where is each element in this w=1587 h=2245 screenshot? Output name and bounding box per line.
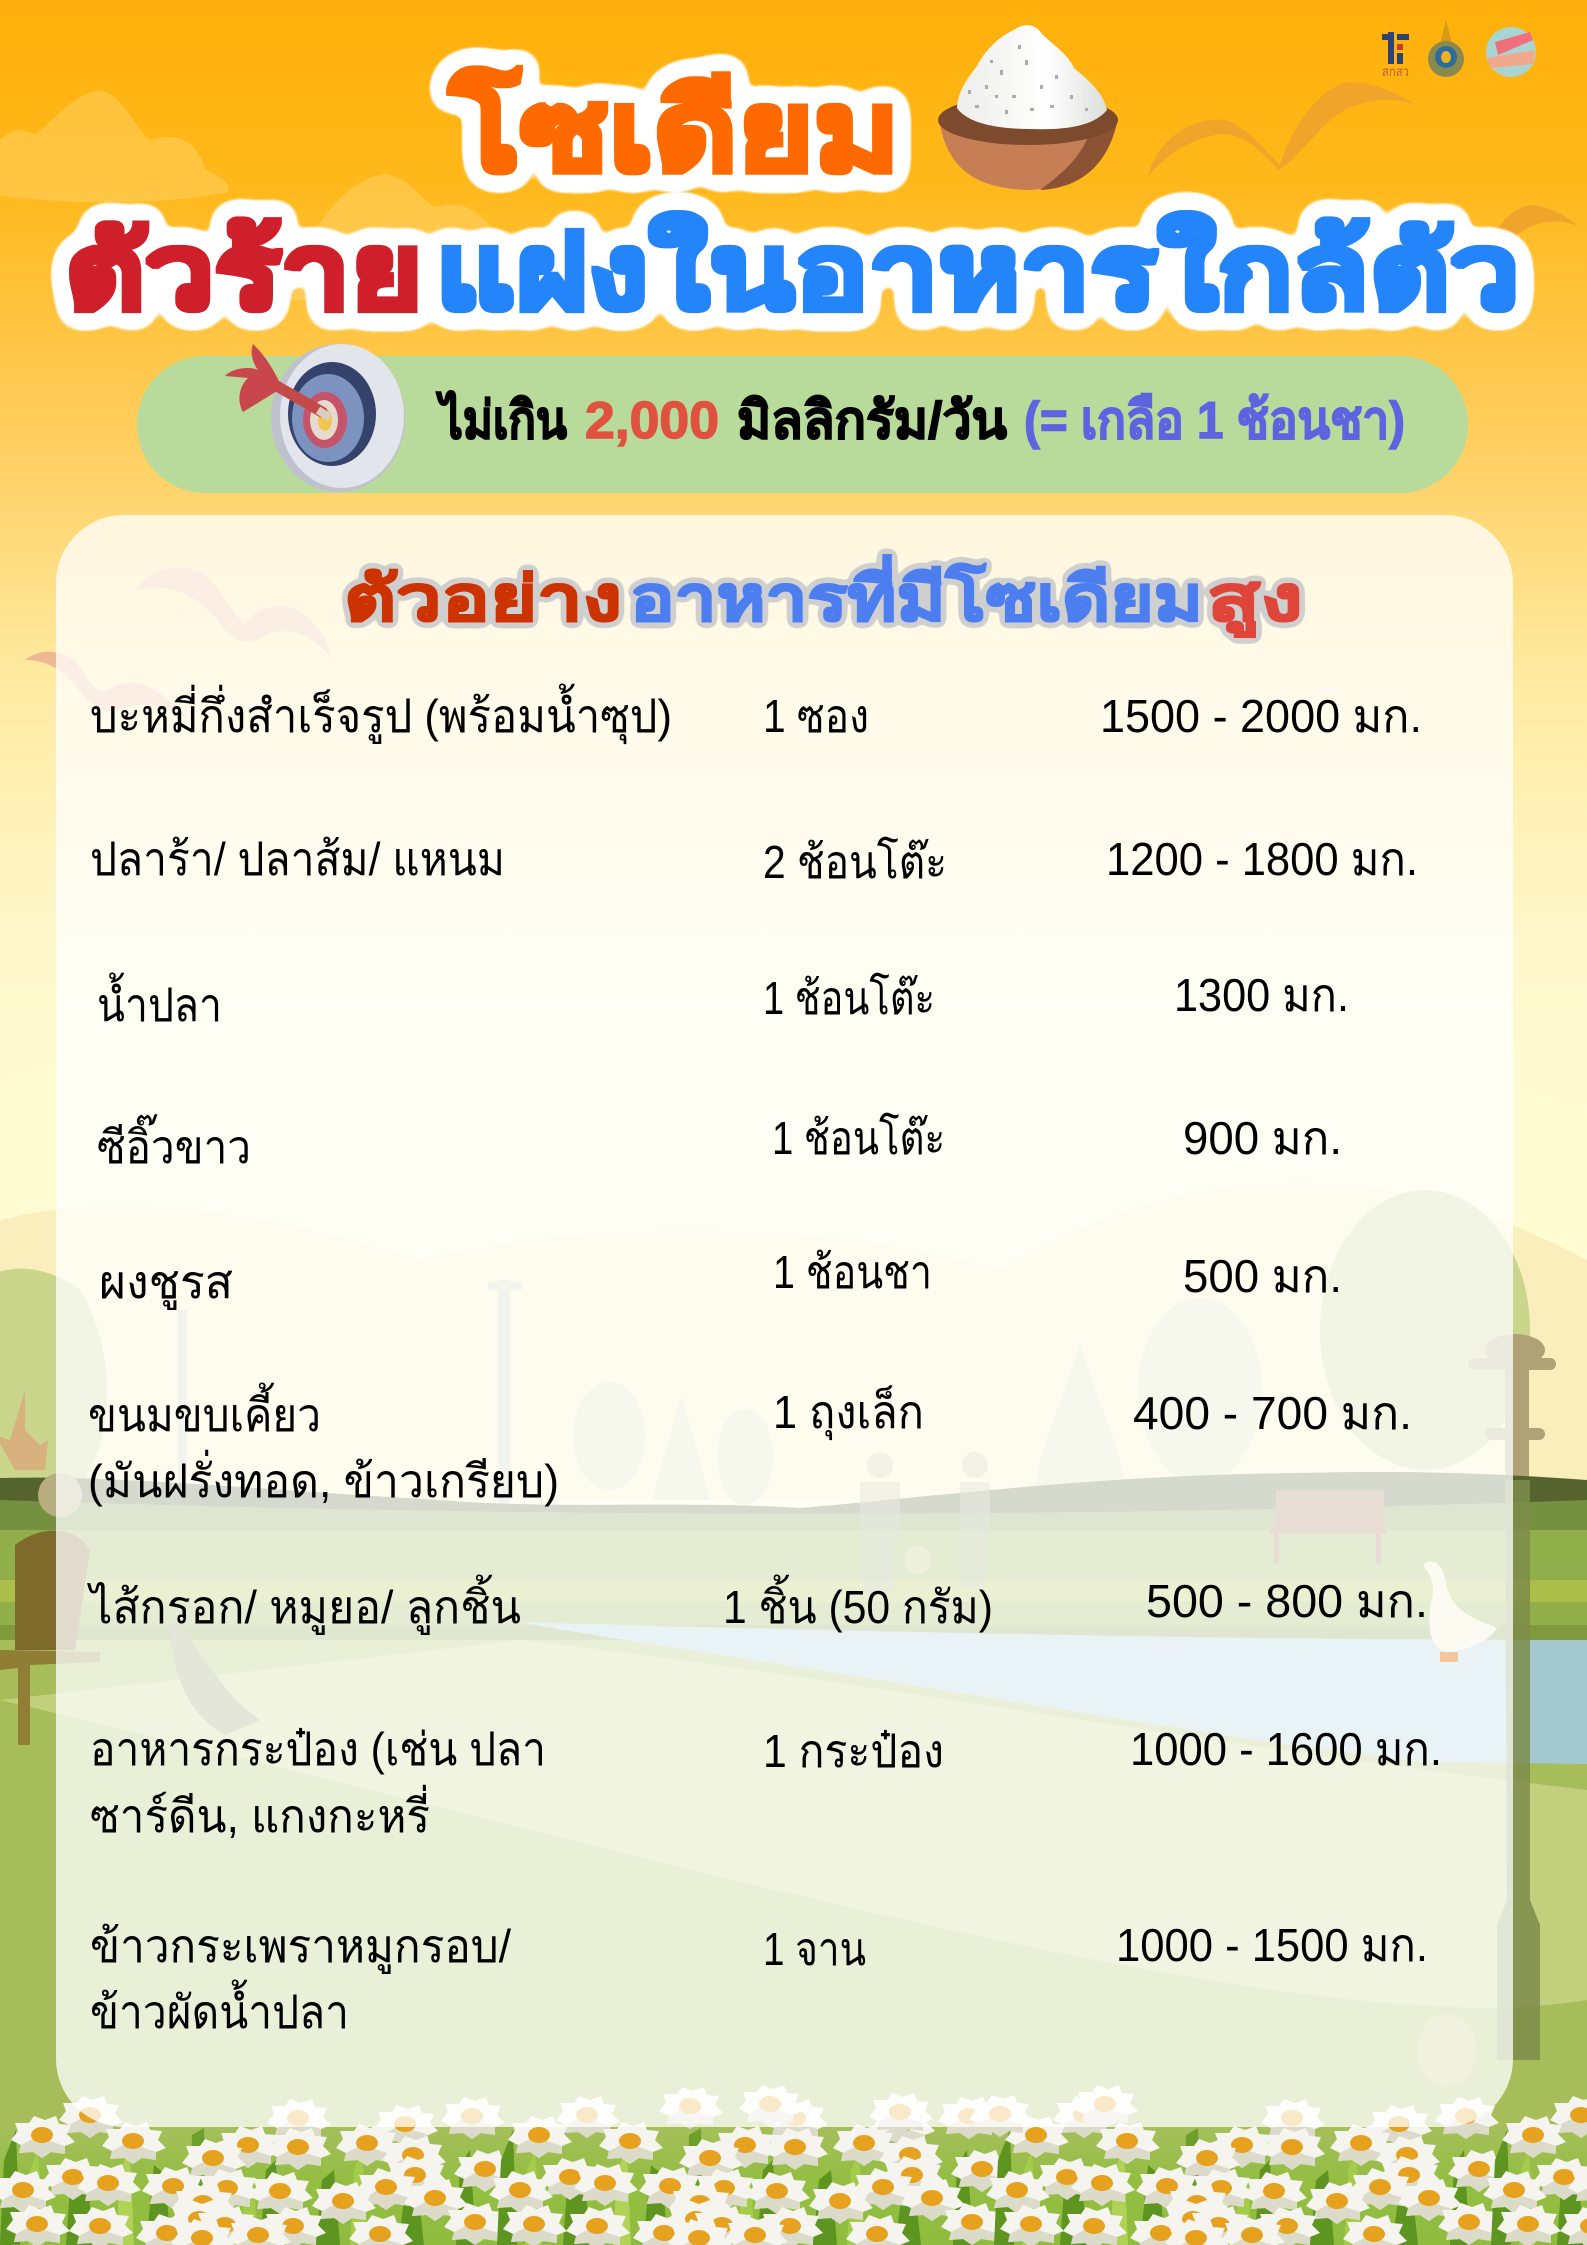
background bird small [1478, 205, 1578, 270]
row: fish sauce: 1 ช้อนโต๊ะ [763, 972, 935, 1024]
light grass slope [0, 1640, 1587, 2008]
logos top right [1382, 20, 1536, 79]
daily limit text: ไม่เกิน [436, 390, 567, 450]
row: sausages [86, 1574, 1428, 1635]
icon: bowl of salt [938, 25, 1118, 190]
daily limit pill [137, 356, 1468, 493]
row: instant noodles: บะหมี่กึ่งสำเร็จรูป (พร้อมน้ำซุป) [90, 683, 672, 745]
row: sausages: 500 - 800 มก. [1146, 1575, 1428, 1627]
pale pebble [1417, 2014, 1477, 2086]
faint birds behind panel [25, 568, 332, 720]
goose [1423, 1561, 1497, 1662]
panel heading: อาหารที่มีโซเดียม [630, 555, 1203, 634]
row: snacks: (มันฝรั่งทอด, ข้าวเกรียบ) [88, 1449, 559, 1507]
row: canned food: ซาร์ดีน, แกงกะหรี่ [90, 1784, 430, 1842]
row: canned food: 1 กระป๋อง [763, 1725, 944, 1777]
meadow hill [0, 1472, 1587, 2245]
row: basil pork rice: ข้าวกระเพราหมูกรอบ/ [90, 1920, 511, 1974]
panel heading: สูง [1207, 565, 1303, 637]
lake [520, 1622, 1587, 1764]
row: fish sauce: น้ำปลา [97, 972, 222, 1031]
title line 2: ตัวร้าย [65, 215, 423, 331]
row: instant noodles: 1 ซอง [763, 690, 869, 742]
background clouds [0, 90, 520, 300]
trees left [0, 1269, 522, 1540]
row: snacks: 400 - 700 มก. [1133, 1387, 1412, 1439]
row: snacks: ขนมขบเคี้ยว [88, 1382, 321, 1441]
row: basil pork rice: 1 จาน [763, 1923, 866, 1975]
row: fish sauce: 1300 มก. [1174, 969, 1349, 1021]
daily limit text [436, 390, 1405, 450]
row: basil pork rice: 1000 - 1500 มก. [1116, 1919, 1428, 1971]
row: soy sauce [97, 1112, 1342, 1173]
row: soy sauce: ซีอิ๊วขาว [97, 1114, 251, 1173]
row: canned food: อาหารกระป๋อง (เช่น ปลา [90, 1723, 546, 1775]
row: canned food: 1000 - 1600 มก. [1130, 1723, 1442, 1775]
row: MSG: ผงชูรส [99, 1256, 233, 1310]
title line 2 [65, 213, 1520, 331]
seated figure left [0, 1473, 260, 1745]
row: basil pork rice [90, 1919, 1428, 2038]
row: sausages: 1 ชิ้น (50 กรัม) [723, 1574, 993, 1633]
trees right [573, 1190, 1530, 1505]
far hills [0, 1047, 1587, 1500]
daily limit text: 2,000 [585, 392, 719, 450]
row: MSG: 500 มก. [1183, 1250, 1342, 1302]
row: basil pork rice: ข้าวผัดน้ำปลา [90, 1979, 349, 2038]
logo: round emblem [1486, 27, 1536, 77]
children playing [860, 1452, 990, 1592]
row: soy sauce: 900 มก. [1183, 1112, 1342, 1164]
row: canned food [90, 1723, 1442, 1842]
logo: ministry seal [1428, 20, 1464, 77]
row: fermented fish: 2 ช้อนโต๊ะ [763, 836, 947, 888]
title line 2: แฝงในอาหารใกล้ตัว [435, 213, 1520, 331]
row: soy sauce: 1 ช้อนโต๊ะ [772, 1112, 945, 1164]
background bird large [1148, 82, 1417, 177]
row: snacks: 1 ถุงเล็ก [773, 1385, 924, 1441]
row: fermented fish [90, 833, 1418, 888]
title line 1: โซเดียม [449, 68, 900, 194]
icon: dart target [225, 344, 405, 492]
logo: TSRI [1382, 32, 1409, 79]
panel heading [344, 555, 1303, 637]
flower field [0, 2085, 1587, 2245]
row: fermented fish: 1200 - 1800 มก. [1106, 833, 1418, 885]
row: MSG: 1 ช้อนชา [773, 1246, 932, 1298]
row: sausages: ไส้กรอก/ หมูยอ/ ลูกชิ้น [86, 1574, 521, 1635]
lamp post right [1468, 1334, 1556, 1480]
row: fish sauce [97, 969, 1349, 1031]
logo: TSRI: สกสว [1382, 64, 1409, 79]
row: fermented fish: ปลาร้า/ ปลาส้ม/ แหนม [90, 833, 505, 885]
bench [1270, 1490, 1386, 1564]
panel: translucent food list background [56, 515, 1513, 2127]
lamp base right [1497, 1480, 1540, 2060]
row: MSG [99, 1246, 1342, 1310]
row: instant noodles [90, 683, 1422, 745]
daily limit text: (= เกลือ 1 ช้อนชา) [1024, 392, 1405, 450]
grass bands [0, 1500, 1587, 2245]
daily limit text: มิลลิกรัม/วัน [737, 392, 1007, 450]
row: instant noodles: 1500 - 2000 มก. [1100, 690, 1422, 742]
panel heading: ตัวอย่าง [344, 565, 622, 634]
row: snacks [88, 1382, 1412, 1507]
